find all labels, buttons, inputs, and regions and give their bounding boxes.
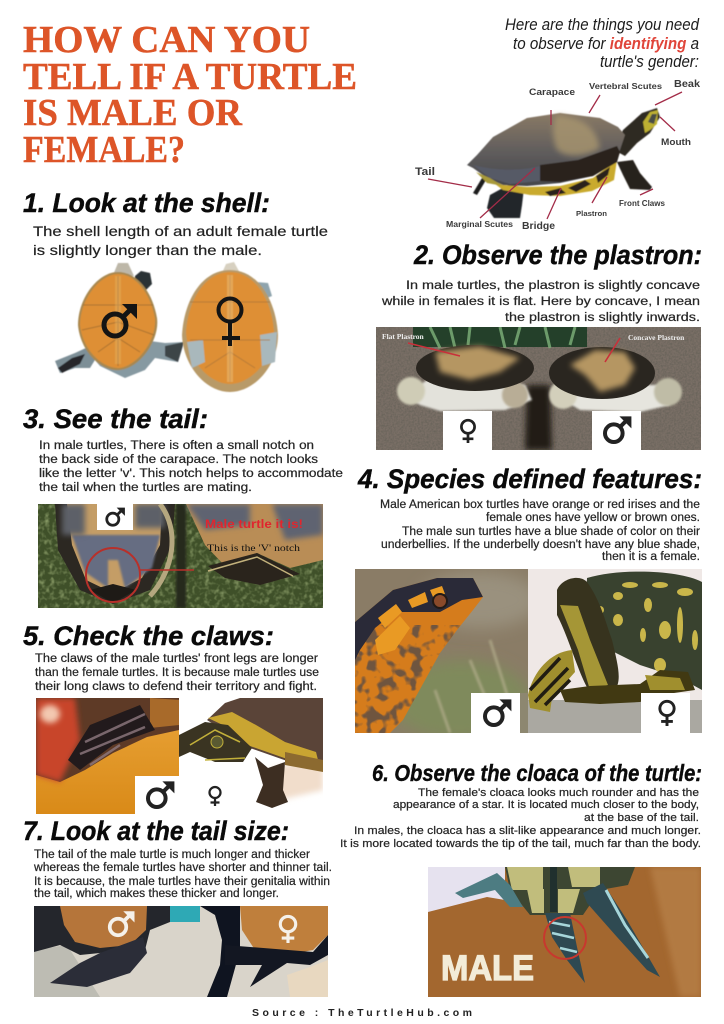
part labels: Marginal Scutes — [446, 219, 513, 229]
text block: It is more located towards the tip of the tail, much far than the body. — [340, 838, 701, 850]
source footer: Source : TheTurtleHub.com — [252, 1007, 472, 1019]
text block: appearance of a star. It is located much closer to the body, — [393, 799, 699, 811]
panel: 3 see the tail — [23, 404, 343, 608]
text block: The shell length of an adult female turtle — [33, 223, 328, 239]
panel: 5 check the claws — [23, 621, 323, 814]
text block: like the letter 'v'. This notch helps to accommodate — [39, 468, 343, 480]
panel: 1 look at the shell — [23, 188, 328, 392]
text block: In males, the cloaca has a slit-like appearance and much longer. — [354, 825, 701, 837]
text block — [39, 440, 343, 494]
photo: tail notch: This is the 'V' notch — [207, 543, 301, 553]
panel: 6 observe the cloaca — [340, 760, 702, 997]
text block — [340, 787, 701, 850]
panel: 7 look at the tail size — [23, 816, 332, 997]
heading: 4. Species defined features: — [357, 464, 702, 494]
part labels: Front Claws — [619, 199, 666, 208]
text block: than the female turtles. It is because male turtles use — [35, 667, 319, 679]
icon: male symbol box — [135, 776, 184, 814]
part labels: Vertebral Scutes — [589, 81, 662, 91]
title: FEMALE? — [23, 129, 185, 171]
part labels: Beak — [674, 78, 700, 90]
heading: 7. Look at the tail size: — [23, 816, 289, 846]
part labels — [415, 78, 700, 232]
text block: The female's cloaca looks much rounder and has the — [418, 787, 699, 799]
part labels: Tail — [415, 166, 435, 178]
text block — [380, 499, 700, 563]
heading: 2. Observe the plastron: — [413, 240, 702, 270]
text block: at the base of the tail. — [584, 812, 699, 824]
text block: It is because, the male turtles have their genitalia within — [34, 876, 330, 888]
title: HOW CAN YOU — [23, 19, 310, 61]
photo: male claws — [36, 698, 180, 814]
text block: female ones have yellow or brown ones. — [486, 512, 700, 524]
text block: the tail, which makes these thicker and longer. — [34, 888, 279, 900]
icon: male turtle shell — [55, 263, 184, 378]
photo: female turtle — [179, 698, 323, 814]
text block: then it is a female. — [602, 551, 700, 563]
photo: female box turtle — [528, 569, 702, 733]
text block — [33, 849, 332, 900]
text block: while in females it is flat. Here by concave, I mean — [381, 296, 700, 308]
intro text: turtle's gender: — [600, 53, 699, 71]
heading: 5. Check the claws: — [23, 621, 274, 651]
heading: 1. Look at the shell: — [23, 188, 270, 218]
text block: the tail when the turtles are mating. — [39, 482, 252, 494]
part labels: Mouth — [661, 137, 691, 148]
title: IS MALE OR — [23, 92, 243, 134]
text block: whereas the female turtles have shorter and thinner tail. — [33, 862, 332, 874]
text block — [381, 280, 700, 324]
photo: flat and concave plastron: Flat Plastron — [382, 332, 425, 341]
panel: 2 observe the plastron — [376, 240, 702, 450]
text block: The tail of the male turtle is much longer and thicker — [34, 849, 310, 861]
photo: tail notch — [38, 504, 323, 608]
text block: In male turtles, the plastron is slightly concave — [406, 280, 700, 292]
photo: male cloaca — [428, 867, 701, 997]
part labels: Bridge — [522, 221, 555, 232]
heading: 3. See the tail: — [23, 404, 208, 434]
photo: tail size comparison — [34, 906, 328, 997]
text block: the plastron is slightly inwards. — [505, 312, 700, 324]
icon: female turtle shell — [182, 262, 278, 392]
part labels: Carapace — [529, 87, 575, 98]
text block: Male American box turtles have orange or red irises and the — [380, 499, 700, 511]
title — [23, 19, 357, 171]
photo: flat and concave plastron — [376, 327, 701, 450]
photo: tail notch: Male turtle it is! — [205, 519, 303, 531]
photo: male cloaca: MALE — [441, 949, 534, 988]
text block: In male turtles, There is often a small notch on — [39, 440, 314, 452]
text block: The male sun turtles have a blue shade of color on their — [402, 526, 700, 538]
intro text: to observe for identifying a — [513, 35, 699, 53]
text block — [33, 223, 328, 258]
turtle anatomy diagram — [415, 78, 700, 232]
title: TELL IF A TURTLE — [23, 56, 357, 98]
intro text: Here are the things you need — [505, 16, 700, 34]
photo: male box turtle — [355, 569, 528, 733]
text block: underbellies. If the underbelly doesn't have any blue shade, — [381, 539, 700, 551]
text block: the back side of the carapace. The notch looks — [39, 454, 318, 466]
text block: The claws of the male turtles' front legs are longer — [35, 653, 318, 665]
intro text — [505, 16, 700, 71]
part labels: Plastron — [576, 209, 607, 218]
icon: female symbol box — [184, 776, 240, 814]
panel: 4 species defined features — [355, 464, 702, 740]
icon: side view turtle — [467, 108, 660, 218]
label lines — [428, 92, 682, 219]
text block: their long claws to defend their territory and fight. — [35, 681, 317, 693]
photo: flat and concave plastron: Concave Plastron — [628, 333, 685, 342]
text block: is slightly longer than the male. — [33, 242, 262, 258]
text block — [35, 653, 319, 693]
